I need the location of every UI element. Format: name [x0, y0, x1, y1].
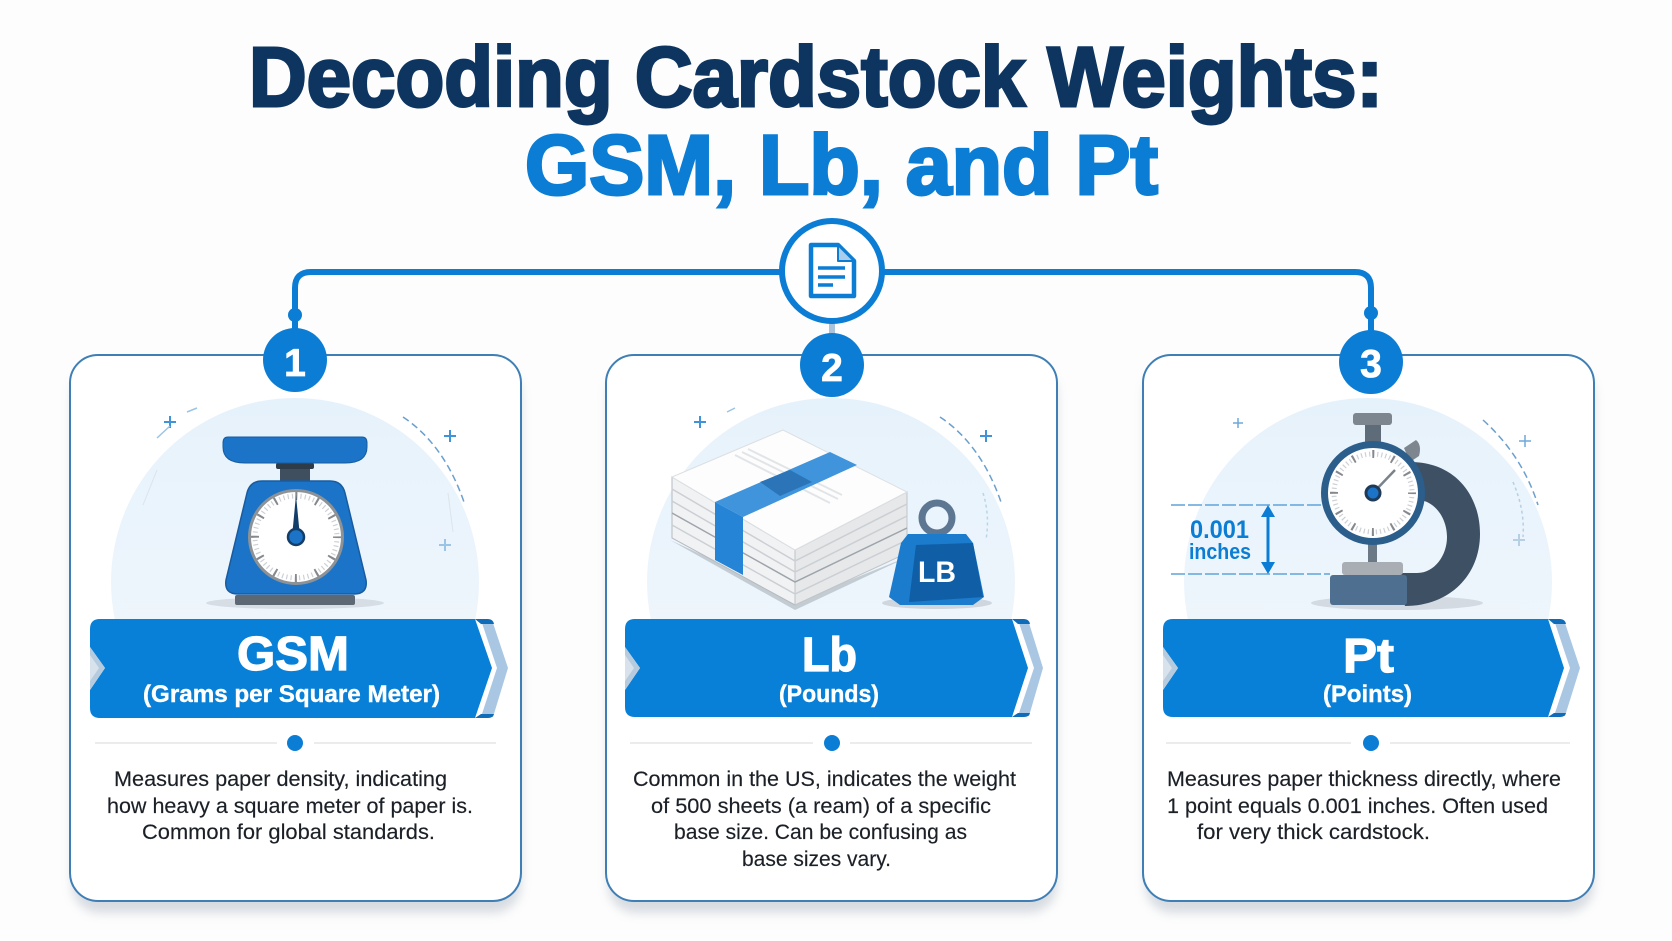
- description: GSM: Measures paper density, indicating: [114, 767, 447, 791]
- badge 2: [800, 333, 864, 397]
- badge 2: 2: [821, 347, 843, 390]
- divider: [630, 735, 1032, 751]
- sparkles: [143, 408, 465, 551]
- description: Pt: 1 point equals 0.001 inches. Often used: [1167, 794, 1548, 818]
- banner text: Lb: Lb: [802, 629, 857, 682]
- description: Lb: Common in the US, indicates the weight: [633, 767, 1016, 791]
- badge 1: 1: [284, 342, 306, 385]
- banner: Pt: [1163, 619, 1580, 717]
- badge 3: 3: [1360, 343, 1382, 386]
- background circle: [647, 398, 1015, 619]
- description: Lb: base sizes vary.: [742, 847, 891, 871]
- background circle: [111, 398, 479, 619]
- icon: thickness gauge: [1311, 413, 1483, 610]
- banner text: Lb: (Pounds): [779, 681, 879, 708]
- badge 3: [1339, 330, 1403, 394]
- badge 1: [263, 328, 327, 392]
- icon: document in circle: [782, 221, 882, 321]
- description: GSM: [107, 767, 473, 844]
- connector lines: [288, 272, 1378, 336]
- measurement annotation: inches: [1189, 539, 1251, 564]
- icon: LB weight: [882, 503, 992, 609]
- panel: GSM: [70, 328, 521, 913]
- banner text: Pt: Pt: [1343, 630, 1394, 683]
- measurement annotation: 0.001: [1190, 516, 1249, 544]
- banner text: GSM: (Grams per Square Meter): [143, 681, 440, 708]
- background circle: [1184, 398, 1552, 619]
- icon: LB weight: LB: [918, 556, 956, 589]
- banner text: GSM: GSM: [237, 628, 349, 681]
- measurement annotation: [1171, 505, 1330, 574]
- banner: GSM: [90, 619, 508, 718]
- description: Lb: [633, 767, 1016, 871]
- description: Lb: of 500 sheets (a ream) of a specific: [651, 794, 991, 818]
- sparkles: [1233, 418, 1538, 546]
- banner text: GSM: [143, 628, 440, 708]
- panel: Pt: [1143, 330, 1594, 913]
- description: Pt: Measures paper thickness directly, where: [1167, 767, 1561, 791]
- description: Pt: for very thick cardstock.: [1197, 820, 1430, 844]
- icon: paper ream: [670, 430, 910, 610]
- divider: [1166, 735, 1570, 751]
- title: GSM, Lb, and Pt: [525, 118, 1158, 212]
- sparkles: [694, 408, 1002, 540]
- description: Lb: base size. Can be confusing as: [674, 820, 967, 844]
- banner text: Pt: (Points): [1323, 681, 1412, 708]
- banner text: Pt: [1323, 630, 1412, 708]
- banner: Lb: [625, 619, 1043, 717]
- banner text: Lb: [779, 629, 879, 708]
- title: Decoding Cardstock Weights:: [249, 30, 1383, 124]
- description: GSM: how heavy a square meter of paper is.: [107, 794, 473, 818]
- description: GSM: Common for global standards.: [142, 820, 435, 844]
- panel: Lb: [606, 333, 1057, 913]
- description: Pt: [1167, 767, 1561, 844]
- icon: kitchen scale: [206, 437, 384, 609]
- title: [249, 30, 1383, 212]
- divider: [95, 735, 496, 751]
